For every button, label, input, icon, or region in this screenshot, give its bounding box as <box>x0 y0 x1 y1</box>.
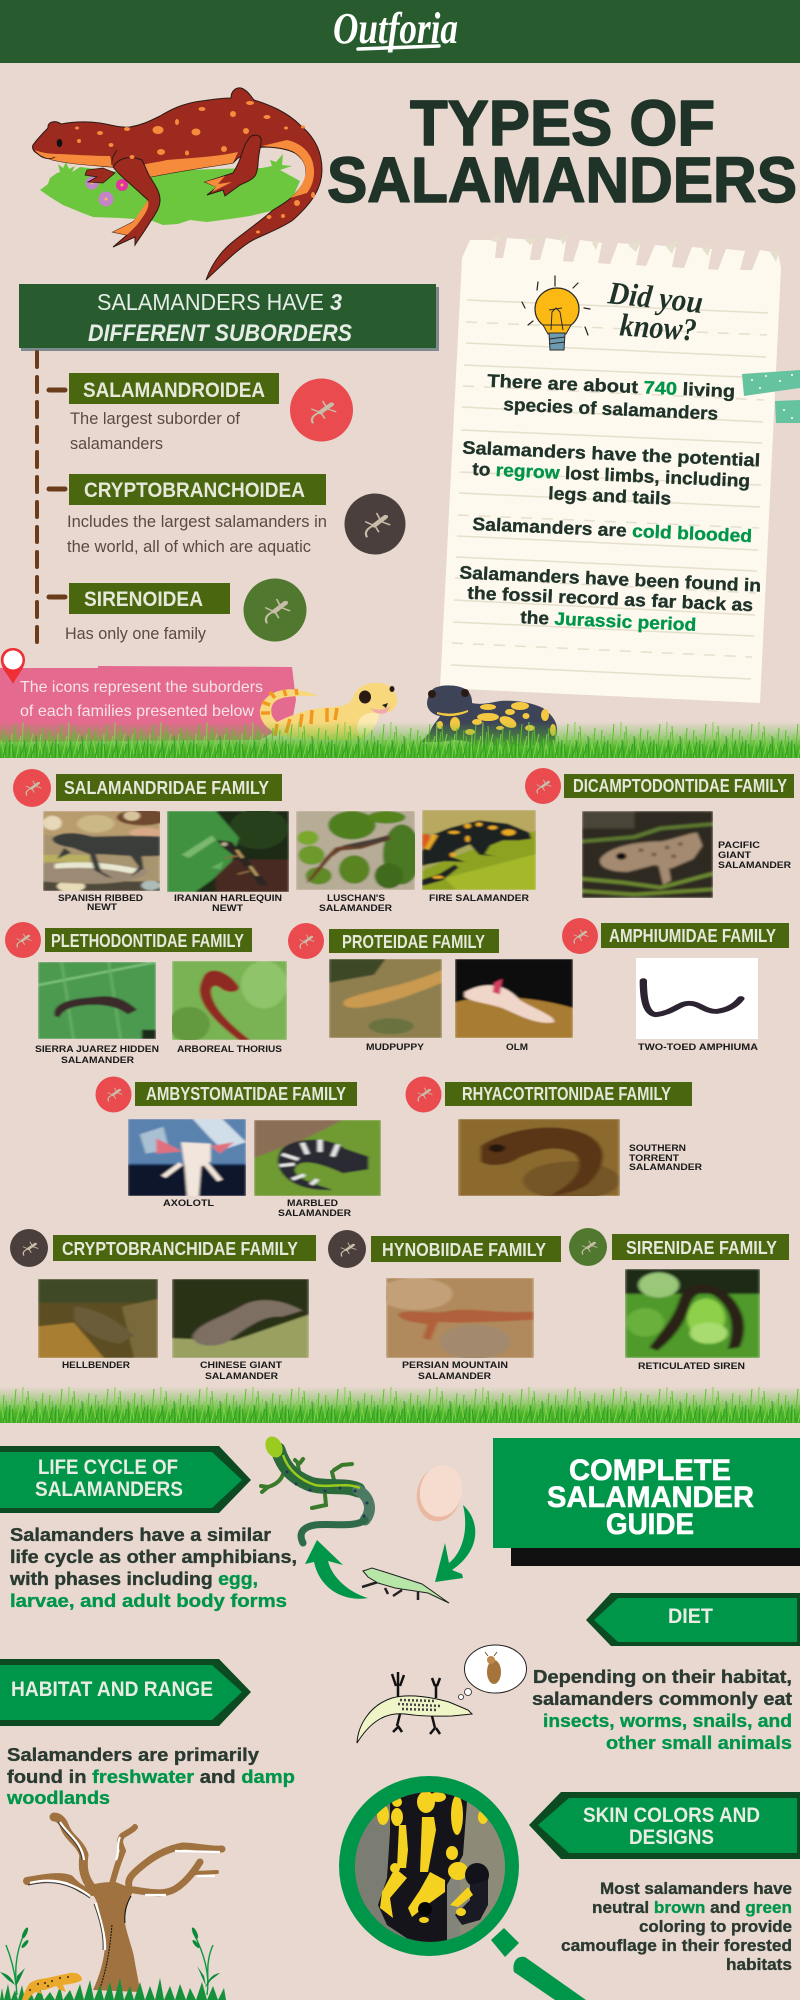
grass strip middle <box>0 1381 800 1423</box>
label: Persian mountain salamander: PERSIAN MOUNTAIN <box>402 1360 508 1371</box>
illustration: magnifying glass with fire salamander <box>339 1776 586 2000</box>
suborder: Cryptobranchoidea: Includes the largest salamanders in <box>67 512 327 531</box>
facts text block: There are about 740 living <box>487 371 736 401</box>
banner: life cycle of salamanders: LIFE CYCLE OF <box>38 1456 178 1479</box>
family: Hynobiidae <box>328 1230 561 1382</box>
labels: Salamandridae species: FIRE SALAMANDER <box>429 893 529 904</box>
labels: Plethodontidae species: SIERRA JUAREZ HIDDEN <box>35 1044 159 1055</box>
text: life cycle description: with phases including egg, <box>9 1568 258 1589</box>
photo: mudpuppy <box>329 959 442 1038</box>
photo: olm <box>455 959 573 1038</box>
suborder: Cryptobranchoidea: the world, all of which are aquatic <box>67 537 311 556</box>
illustration: larva <box>362 1568 449 1603</box>
suborder: Salamandroidea: SALAMANDROIDEA <box>83 379 265 402</box>
labels: Salamandridae species: LUSCHAN'S <box>327 893 385 904</box>
text: habitat description <box>6 1744 295 1808</box>
facts text block: Salamanders have been found in <box>459 562 762 596</box>
facts text block <box>459 371 762 635</box>
label: southern torrent salamander: TORRENT <box>629 1153 679 1164</box>
labels: Proteidae species: OLM <box>506 1042 528 1053</box>
family: Sirenidae: SIRENIDAE FAMILY <box>626 1238 777 1258</box>
family: Salamandridae <box>13 769 536 892</box>
facts text block: species of salamanders <box>503 394 719 424</box>
labels: Plethodontidae species <box>35 1044 282 1066</box>
text: habitat description: found in freshwater and damp <box>7 1766 295 1787</box>
suborder: Salamandroidea <box>49 373 353 453</box>
illustration: leopard salamander <box>22 1973 82 2000</box>
labels: Ambystomatidae species: MARBLED <box>287 1198 338 1209</box>
family: Rhyacotritonidae: RHYACOTRITONIDAE FAMILY <box>462 1084 671 1104</box>
banner: life cycle of salamanders: SALAMANDERS <box>35 1478 183 1501</box>
labels: Salamandridae species: IRANIAN HARLEQUIN <box>174 893 282 904</box>
photo: reticulated siren <box>625 1269 760 1358</box>
banner: habitat and range <box>0 1659 251 1726</box>
grass patch <box>40 154 300 225</box>
thought bubble <box>458 1645 526 1700</box>
suborder: Sirenoidea: Has only one family <box>65 624 206 643</box>
text: life cycle description: Salamanders have a similar <box>10 1524 271 1545</box>
labels: Cryptobranchidae species: CHINESE GIANT <box>200 1360 282 1371</box>
banner: skin colors and designs: DESIGNS <box>629 1826 714 1849</box>
logo: Outforia: Outforia <box>333 4 458 53</box>
icon: light bulb <box>522 276 590 350</box>
illustration: adult salamander, life cycle <box>261 1434 369 1543</box>
banner: life cycle of salamanders <box>0 1446 251 1513</box>
suborder: Salamandroidea: salamanders <box>70 434 163 453</box>
facts text block: legs and tails <box>548 483 672 509</box>
text: skin colors description: camouflage in their forested <box>561 1936 792 1955</box>
suborder: Sirenoidea <box>49 578 306 643</box>
labels: Cryptobranchidae species: SALAMANDER <box>205 1371 278 1382</box>
family: Proteidae: PROTEIDAE FAMILY <box>342 932 485 952</box>
arrow: egg to larva <box>435 1505 475 1582</box>
panel: suborders heading: DIFFERENT SUBORDERS <box>88 320 352 347</box>
facts text block: the fossil record as far back as <box>467 583 754 615</box>
family: Cryptobranchidae <box>10 1229 316 1382</box>
family: Amphiumidae: TWO-TOED AMPHIUMA <box>638 1042 758 1053</box>
family: Plethodontidae <box>5 922 287 1042</box>
text: diet description: other small animals <box>606 1732 792 1753</box>
decorative tape <box>742 370 800 423</box>
text: diet description <box>532 1666 792 1753</box>
labels: Ambystomatidae species: SALAMANDER <box>278 1208 351 1219</box>
photo: marbled salamander <box>254 1120 381 1196</box>
facts text block: Salamanders are cold blooded <box>472 514 753 546</box>
title <box>327 87 797 216</box>
labels: Plethodontidae species: SALAMANDER <box>61 1055 134 1066</box>
photo: Pacific giant salamander <box>582 811 713 898</box>
text: skin colors description: Most salamanders have <box>600 1879 792 1898</box>
label: Pacific giant salamander: PACIFIC <box>718 840 760 851</box>
labels: Plethodontidae species: ARBOREAL THORIUS <box>177 1044 282 1055</box>
banner: skin colors and designs: SKIN COLORS AND <box>583 1804 760 1827</box>
label: Pacific giant salamander: SALAMANDER <box>718 860 791 871</box>
photo: Sierra Juarez hidden salamander <box>38 962 156 1039</box>
illustration: egg <box>412 1461 467 1525</box>
panel: complete salamander guide: COMPLETE <box>569 1454 731 1487</box>
panel: suborders heading <box>19 284 439 351</box>
text: life cycle description <box>9 1524 297 1611</box>
panel: complete salamander guide <box>493 1438 800 1566</box>
grass strip top <box>0 716 800 758</box>
front leg <box>113 158 160 247</box>
labels: Salamandridae species <box>58 893 529 914</box>
arrow: larva to adult <box>305 1540 368 1599</box>
text: habitat description: Salamanders are primarily <box>7 1744 260 1765</box>
suborder: Cryptobranchoidea: CRYPTOBRANCHOIDEA <box>84 479 305 502</box>
label: southern torrent salamander: SOUTHERN <box>629 1143 686 1154</box>
photo: arboreal thorius <box>172 961 287 1040</box>
label: Pacific giant salamander <box>718 840 791 871</box>
family: Rhyacotritonidae <box>406 1076 702 1200</box>
suborder: Cryptobranchoidea <box>49 474 406 556</box>
facts text block: to regrow lost limbs, including <box>472 459 751 491</box>
body <box>33 88 322 280</box>
panel: did you know paper <box>440 232 781 703</box>
suborder: Salamandroidea: The largest suborder of <box>70 409 240 428</box>
labels: Salamandridae species: SPANISH RIBBED <box>58 893 143 904</box>
text: skin colors description: coloring to provide <box>639 1917 792 1936</box>
facts text block: the Jurassic period <box>520 607 697 635</box>
text: habitat description: woodlands <box>6 1787 110 1808</box>
label: southern torrent salamander: SALAMANDER <box>629 1162 702 1173</box>
chin and belly orange <box>35 150 113 167</box>
banner: habitat and range: HABITAT AND RANGE <box>11 1678 213 1701</box>
facts text block: Salamanders have the potential <box>462 438 761 470</box>
photo: hellbender <box>38 1279 158 1358</box>
family: Hynobiidae: HYNOBIIDAE FAMILY <box>382 1240 546 1260</box>
illustration: yellow gecko <box>260 683 397 740</box>
illustration: reeds and grass <box>0 1927 226 2000</box>
labels: Salamandridae species: NEWT <box>87 902 117 913</box>
illustration: bare tree <box>27 1817 222 1992</box>
title: TYPES OF <box>410 87 715 159</box>
text: skin colors description: neutral brown and green <box>592 1898 792 1917</box>
family: Dicamptodontidae <box>525 768 794 898</box>
callout: icon legend note <box>0 648 296 742</box>
labels: Salamandridae species: NEWT <box>212 903 243 914</box>
dashed timeline <box>35 352 39 652</box>
family: Amphiumidae <box>562 918 789 1053</box>
labels: Proteidae species: MUDPUPPY <box>366 1042 425 1053</box>
family: Cryptobranchidae: CRYPTOBRANCHIDAE FAMILY <box>62 1239 298 1259</box>
text: skin colors description <box>561 1879 792 1974</box>
labels: Proteidae species <box>366 1042 528 1053</box>
rear leg <box>205 135 261 196</box>
callout: icon legend note: The icons represent the suborders <box>20 679 263 696</box>
photo: Spanish ribbed newt <box>43 811 160 891</box>
text: life cycle description: life cycle as other amphibians, <box>10 1546 297 1567</box>
photo: southern torrent salamander <box>458 1119 620 1196</box>
heading: did you know: Did you <box>606 274 705 320</box>
labels: Cryptobranchidae species <box>62 1360 282 1382</box>
photo: fire salamander <box>422 810 536 890</box>
label: Persian mountain salamander <box>402 1360 508 1382</box>
suborder: Sirenoidea: SIRENOIDEA <box>84 588 203 611</box>
label: Persian mountain salamander: SALAMANDER <box>418 1371 491 1382</box>
text: diet description: salamanders commonly eat <box>532 1688 792 1709</box>
callout: icon legend note: of each families presented below <box>20 703 254 720</box>
header bar with logo <box>0 0 800 63</box>
banner: diet: DIET <box>668 1605 713 1628</box>
label: Pacific giant salamander: GIANT <box>718 850 751 861</box>
heading: did you know <box>606 274 705 348</box>
text: skin colors description: habitats <box>726 1955 792 1974</box>
photo: Chinese giant salamander <box>172 1279 309 1358</box>
photo: Luschan's salamander <box>296 811 415 890</box>
family: Ambystomatidae <box>96 1076 381 1219</box>
family: Sirenidae <box>569 1228 789 1372</box>
photo: Iranian harlequin newt <box>167 811 289 892</box>
banner: skin colors and designs <box>529 1792 800 1859</box>
photo: Persian mountain salamander <box>386 1278 534 1358</box>
labels: Ambystomatidae species: AXOLOTL <box>163 1198 214 1209</box>
text: diet description: Depending on their habitat, <box>533 1666 792 1687</box>
photo: axolotl <box>128 1119 246 1196</box>
panel: complete salamander guide: SALAMANDER <box>547 1481 754 1514</box>
panel: complete salamander guide: GUIDE <box>606 1508 694 1541</box>
photo: two-toed amphiuma <box>636 958 758 1039</box>
label: southern torrent salamander <box>629 1143 702 1173</box>
labels: Ambystomatidae species <box>163 1198 351 1219</box>
illustration: black and yellow salamander <box>421 685 557 752</box>
illustration: red salamander on grass <box>33 88 322 280</box>
text: life cycle description: larvae, and adult body forms <box>10 1590 287 1611</box>
family: Plethodontidae: PLETHODONTIDAE FAMILY <box>51 931 244 951</box>
text: diet description: insects, worms, snails, and <box>543 1710 792 1731</box>
family: Salamandridae: SALAMANDRIDAE FAMILY <box>64 778 269 798</box>
family: Ambystomatidae: AMBYSTOMATIDAE FAMILY <box>146 1084 346 1104</box>
family: Sirenidae: RETICULATED SIREN <box>638 1361 745 1372</box>
labels: Cryptobranchidae species: HELLBENDER <box>62 1360 130 1371</box>
family: Proteidae <box>288 923 758 1039</box>
labels: Salamandridae species: SALAMANDER <box>319 903 392 914</box>
heading: did you know: know? <box>619 306 698 348</box>
small hand <box>85 168 115 183</box>
panel: suborders heading: SALAMANDERS HAVE 3 <box>97 289 342 315</box>
illustration: salamander with thought bubble <box>357 1645 526 1743</box>
banner: diet <box>586 1593 800 1646</box>
